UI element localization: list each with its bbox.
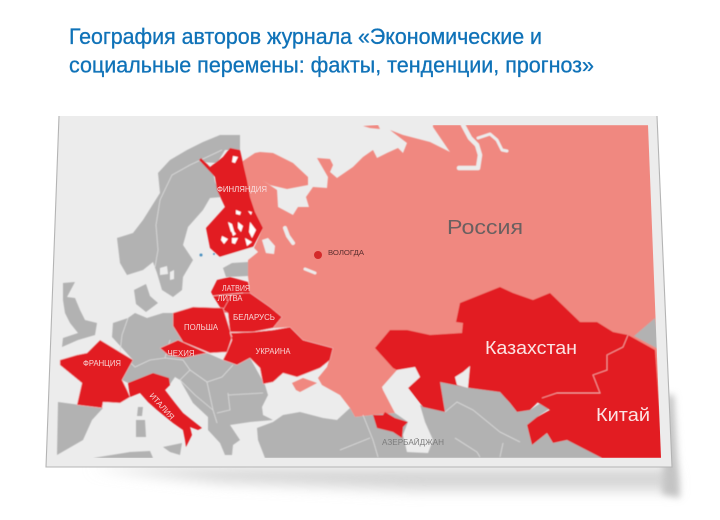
Vologda marker: ВОЛОГДА: [328, 250, 364, 257]
Azerbaijan: [373, 412, 408, 438]
country labels: БЕЛАРУСЬ: [233, 313, 275, 322]
Crimea: [292, 378, 317, 392]
France: [60, 340, 133, 408]
Kazakhstan-China border: [542, 335, 628, 398]
Scandinavia: [117, 135, 240, 297]
red countries: [60, 148, 663, 458]
Ukraine: [223, 327, 333, 384]
title: социальные перемены: факты, тенденции, прогноз»: [69, 52, 594, 78]
Arctic gulfs: [285, 125, 507, 273]
Denmark: [134, 284, 158, 312]
Africa: [93, 451, 153, 458]
UK: [62, 282, 97, 347]
Poland: [173, 307, 232, 353]
country labels: ПОЛЬША: [184, 323, 219, 332]
Latvia and Lithuania: [211, 277, 250, 313]
Aral Sea: [455, 366, 470, 388]
Mongolia: [634, 318, 657, 348]
China: [527, 335, 663, 458]
Turkey and Central Asia: [257, 382, 602, 458]
internal borders between red countries: [212, 293, 243, 337]
map: [57, 125, 663, 460]
country labels: ЛИТВА: [218, 294, 243, 303]
country labels: УКРАИНА: [256, 347, 291, 356]
title: География авторов журнала «Экономические и: [69, 24, 542, 49]
Kazakhstan: [375, 287, 628, 412]
grey Europe: [57, 135, 660, 458]
grey country borders: [120, 150, 520, 457]
card shadow: [90, 395, 680, 498]
Russia label: Россия: [447, 217, 523, 239]
Belarus: [223, 293, 282, 332]
Finland: [199, 148, 263, 257]
Gulf of Finland: [200, 247, 258, 262]
country labels: [83, 185, 444, 447]
country labels: ФРАНЦИЯ: [83, 359, 121, 368]
Mediterranean islands: [137, 407, 143, 416]
country labels: ЛАТВИЯ: [222, 284, 250, 293]
Czechia: [160, 340, 207, 358]
Estonia: [223, 262, 248, 277]
country labels: ЧЕХИЯ: [168, 349, 195, 358]
country labels: АЗЕРБАЙДЖАН: [382, 438, 444, 447]
title: [69, 24, 594, 78]
Caspian Sea: [382, 367, 433, 453]
country labels: ФИНЛЯНДИЯ: [217, 185, 267, 194]
Russia: [242, 125, 660, 418]
Continental Europe: [112, 313, 273, 455]
map card: [46, 116, 672, 467]
Italy: [128, 373, 202, 447]
Vologda marker: [314, 250, 364, 259]
country labels: ИТАЛИЯ: [148, 391, 176, 422]
Kazakhstan label: Казахстан: [485, 338, 577, 358]
Iberia: [57, 402, 103, 455]
China label: Китай: [596, 405, 650, 425]
